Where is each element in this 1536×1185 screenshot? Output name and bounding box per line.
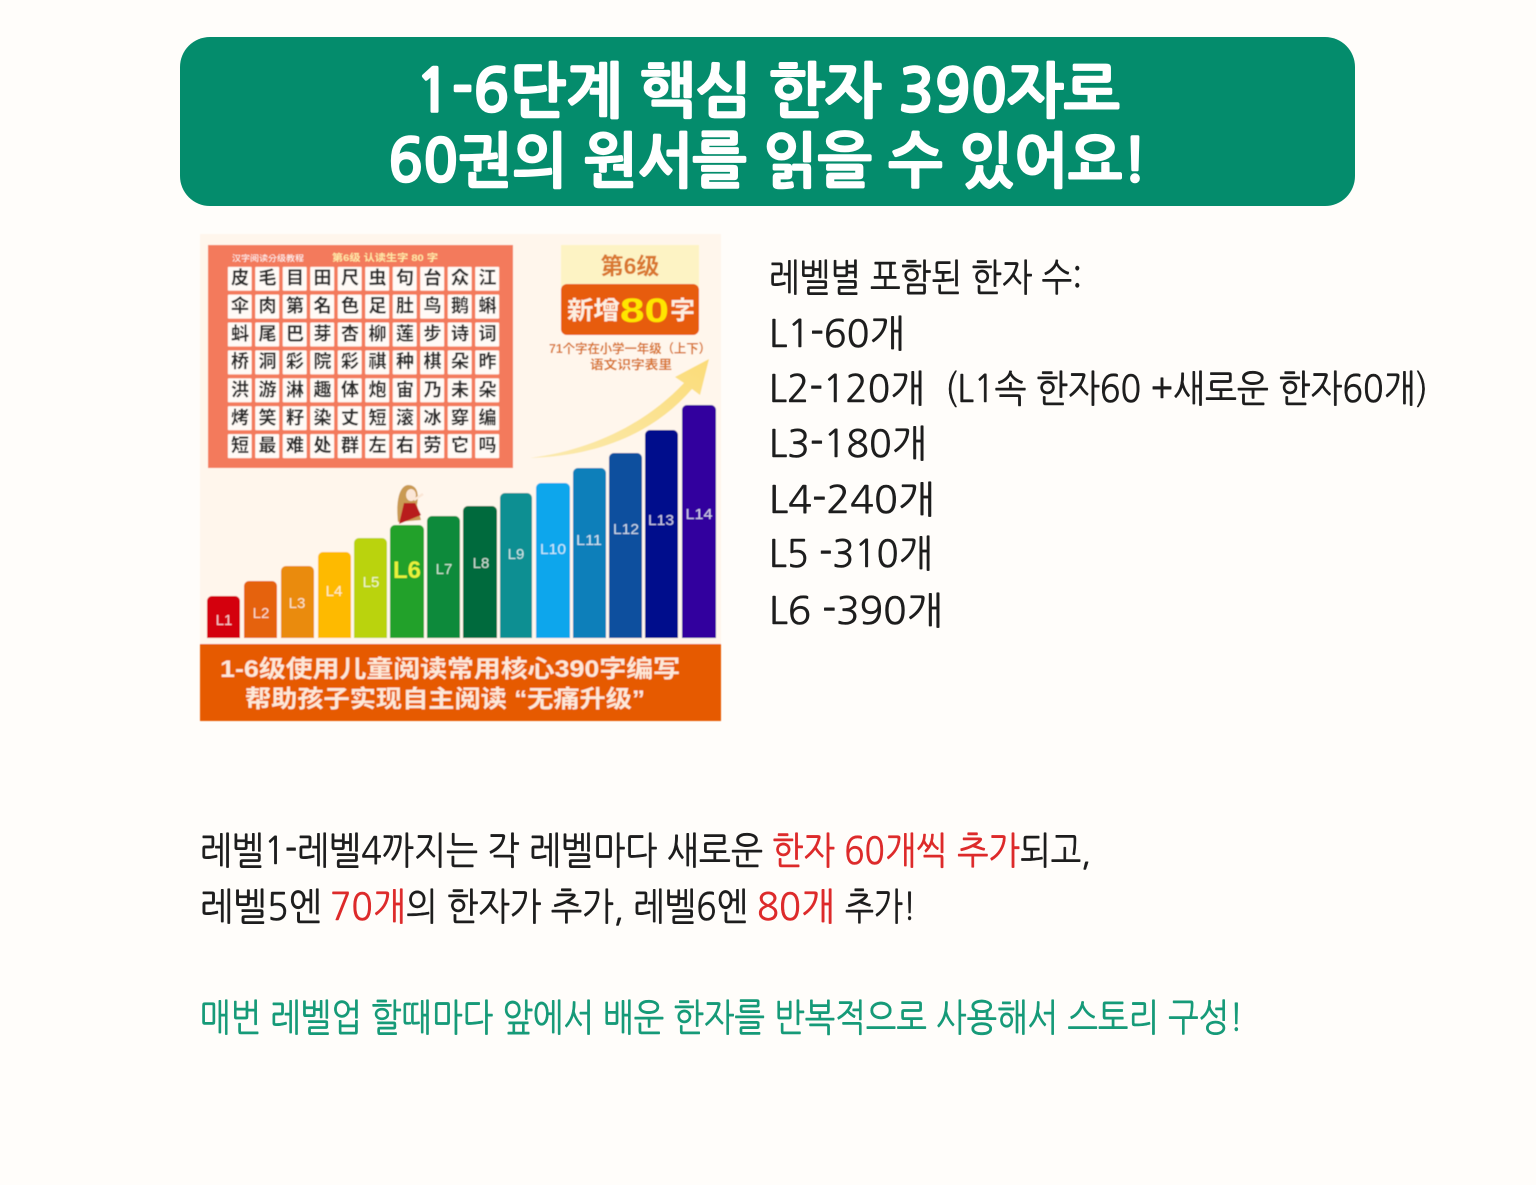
panel: orange character table: 第6级 认读生字 80 字 <box>332 252 438 264</box>
panel: orange character table: 皮毛目田尺虫句台众江 <box>231 264 496 290</box>
text block: character count by level: 레벨별 포함된 한자 수: <box>769 259 1082 297</box>
icon: girl on L6 bar <box>397 485 423 524</box>
bar chart: levels L1 to L14: L5 <box>363 574 379 591</box>
callout: level 6 adds 80 characters: 语文识字表里 <box>590 357 672 372</box>
title line 1: 1-6단계 핵심 한자 390자로 <box>415 61 1120 121</box>
text block: new characters per level: 한자 60개씩 추가 <box>772 832 1020 870</box>
panel: orange character table: 汉字阅读分级教程 <box>232 253 304 263</box>
text block: new characters per level: 레벨1-레벨4까지는 각 레벨마다 새로운 <box>200 832 763 870</box>
text block: new characters per level: 되고, <box>1020 832 1091 870</box>
banner: orange slogan: 帮助孩子实现自主阅读 “无痛升级” <box>245 686 645 713</box>
text block: green summary: 매번 레벨업 할때마다 앞에서 배운 한자를 반복적으로 사용해서 스토리 구성! <box>200 999 1243 1037</box>
title banner <box>180 37 1355 206</box>
banner: orange slogan: 1-6级使用儿童阅读常用核心390字编写 <box>220 656 680 683</box>
text block: character count by level: L3-180개 <box>769 425 927 463</box>
text block: new characters per level: 의 한자가 추가, 레벨6엔 <box>406 888 748 926</box>
callout: level 6 adds 80 characters <box>549 245 711 372</box>
text block: new characters per level: 추가! <box>845 888 916 926</box>
panel: orange character table <box>208 245 513 468</box>
callout: level 6 adds 80 characters: 新增 <box>567 297 620 325</box>
panel: orange character table: 洪游淋趣体炮宙乃未朵 <box>231 376 496 402</box>
text block: new characters per level: 80개 <box>757 888 835 926</box>
text block: new characters per level: 70개 <box>330 888 406 926</box>
text block: character count by level: L4-240개 <box>769 481 935 519</box>
panel: orange character table: 短最难处群左右劳它吗 <box>231 432 496 458</box>
text block: character count by level <box>769 259 1428 630</box>
title line 2: 60권의 원서를 읽을 수 있어요! <box>388 130 1147 191</box>
text block: character count by level: (L1속 한자60 +새로운 한자60개) <box>945 370 1428 408</box>
panel: orange character table: 蚪尾巴芽杏柳莲步诗词 <box>231 320 496 346</box>
panel: orange character table: 桥洞彩院彩祺种棋朵昨 <box>231 348 496 374</box>
text block: new characters per level: 레벨5엔 <box>200 888 322 926</box>
picture: level chart poster <box>200 234 721 721</box>
panel: orange character table: 伞肉第名色足肚鸟鹅蝌 <box>231 292 496 318</box>
bar chart: levels L1 to L14: L10 <box>540 541 566 558</box>
bar chart: levels L1 to L14: L3 <box>289 595 305 612</box>
panel: orange character table: 烤笑籽染丈短滚冰穿编 <box>231 404 496 430</box>
text block: character count by level: L1-60개 <box>769 315 905 353</box>
text block: character count by level: L6 -390개 <box>769 592 943 630</box>
bar chart: levels L1 to L14: L2 <box>253 605 269 622</box>
callout: level 6 adds 80 characters: 第6级 <box>601 253 659 279</box>
bar chart: levels L1 to L14: L1 <box>216 612 232 629</box>
bar chart: levels L1 to L14: L6 <box>393 557 421 584</box>
callout: level 6 adds 80 characters: 71个字在小学一年级（上下） <box>549 341 711 356</box>
bar chart: levels L1 to L14: L8 <box>473 555 489 572</box>
text block: new characters per level <box>200 832 1091 926</box>
bar chart: levels L1 to L14: L11 <box>576 532 602 549</box>
arrow: rising curve <box>530 359 709 458</box>
banner: orange slogan <box>200 644 721 721</box>
text block: character count by level: L5 -310개 <box>769 535 933 573</box>
callout: level 6 adds 80 characters: 80 <box>620 292 669 330</box>
bar chart: levels L1 to L14: L4 <box>326 583 342 600</box>
bar chart: levels L1 to L14 <box>207 405 716 638</box>
text block: character count by level: L2-120개 <box>769 370 925 408</box>
bar chart: levels L1 to L14: L7 <box>436 561 452 578</box>
bar chart: levels L1 to L14: L13 <box>648 512 674 529</box>
callout: level 6 adds 80 characters: 字 <box>670 297 695 325</box>
bar chart: levels L1 to L14: L14 <box>686 506 712 523</box>
bar chart: levels L1 to L14: L12 <box>613 521 639 538</box>
bar chart: levels L1 to L14: L9 <box>508 546 524 563</box>
